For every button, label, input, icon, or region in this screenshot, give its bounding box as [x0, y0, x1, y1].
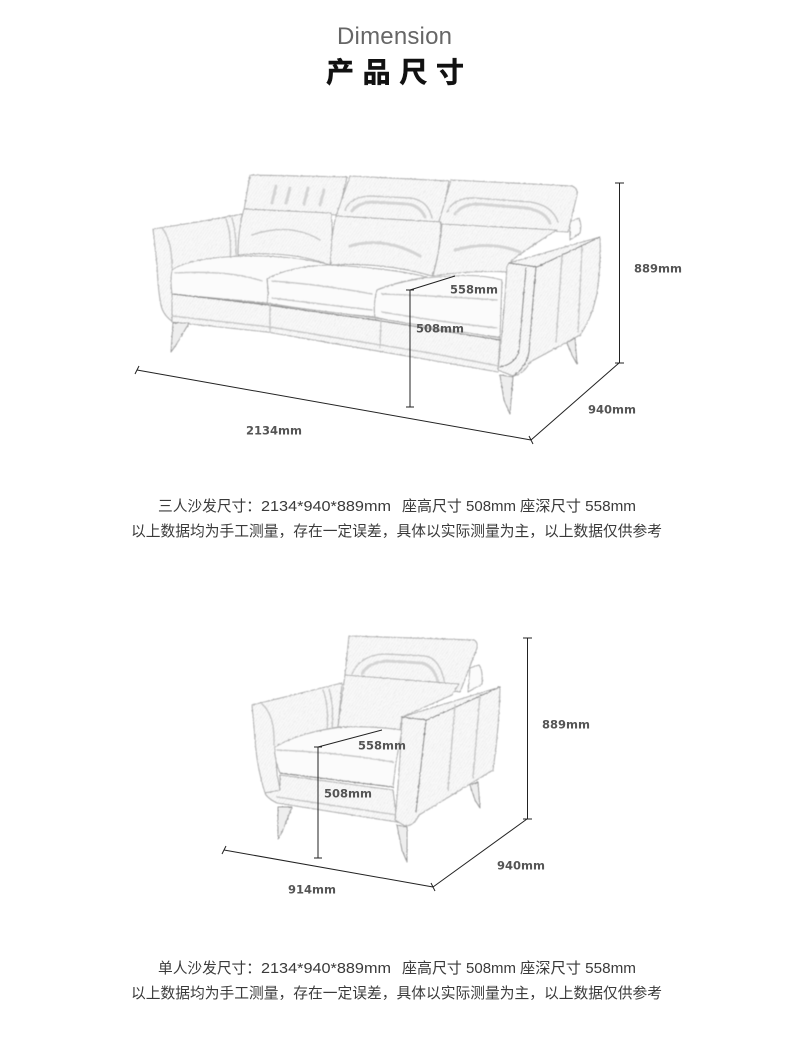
sofa spec line: 座深尺寸 558mm: [520, 498, 636, 515]
chair base: [265, 775, 397, 822]
sofa disclaimer: 以上数据均为手工测量，存在一定误差，具体以实际测量为主，以上数据仅供参考: [131, 523, 662, 540]
sofa left arm: [153, 214, 242, 322]
label: 940mm: 940mm: [497, 858, 545, 872]
sofa spec line: 2134*940*889mm: [261, 499, 391, 515]
armchair spec line: 座高尺寸 508mm: [402, 960, 516, 977]
label: 889mm: 889mm: [542, 718, 590, 732]
armchair spec line: 座深尺寸 558mm: [520, 960, 636, 977]
label: 940mm: 940mm: [588, 402, 636, 416]
armchair spec line: 单人沙发尺寸：: [158, 960, 261, 977]
chair left arm: [252, 683, 342, 793]
heading: 产品尺寸: 产品尺寸: [326, 57, 464, 88]
sofa right arm: [498, 237, 600, 376]
sofa lumbar pillows: [238, 209, 557, 276]
dimension lines: sofa: [135, 183, 624, 444]
sofa spec line: [158, 498, 636, 515]
label: 508mm: 508mm: [416, 322, 464, 336]
sofa seat cushions: [171, 256, 502, 337]
armchair disclaimer: 以上数据均为手工测量，存在一定误差，具体以实际测量为主，以上数据仅供参考: [131, 985, 662, 1002]
chair back frame: [468, 665, 482, 692]
chair back cushion: [345, 636, 477, 692]
armchair spec line: [158, 960, 636, 977]
chair right arm: [395, 687, 500, 826]
label: 2134mm: 2134mm: [246, 424, 302, 438]
sofa back frame right: [570, 218, 581, 240]
chair seat cushion: [275, 727, 402, 787]
heading: Dimension: Dimension: [337, 23, 452, 50]
dimension lines: armchair: [222, 638, 532, 891]
sofa spec line: 座高尺寸 508mm: [402, 498, 516, 515]
illustration: armchair: [252, 636, 500, 862]
illustration: three-seat sofa: [153, 175, 600, 414]
sofa base rail: [172, 294, 500, 372]
armchair spec line: 2134*940*889mm: [261, 961, 391, 977]
sofa legs: [171, 323, 577, 414]
label: 914mm: 914mm: [288, 882, 336, 896]
sofa spec line: 三人沙发尺寸：: [158, 498, 261, 515]
label: 508mm: 508mm: [324, 786, 372, 800]
label: 558mm: 558mm: [358, 738, 406, 752]
chair lower pillow: [338, 675, 459, 730]
label: 558mm: 558mm: [450, 282, 498, 296]
label: 889mm: 889mm: [634, 262, 682, 276]
sofa back cushions: [244, 175, 577, 232]
chair legs: [278, 782, 480, 862]
